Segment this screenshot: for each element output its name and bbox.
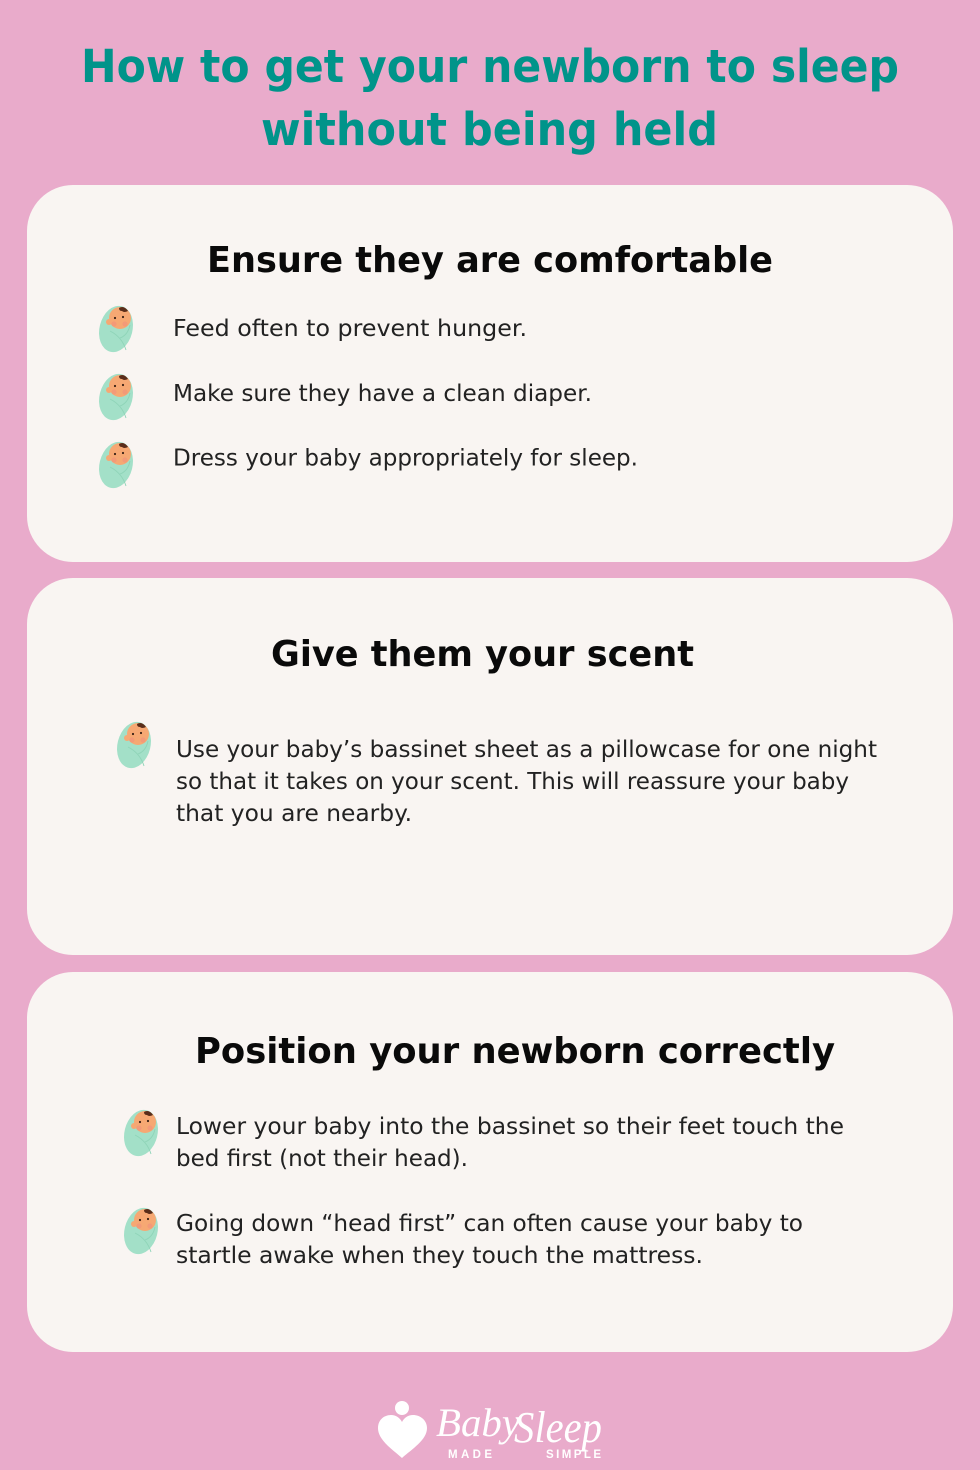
icon: swaddled baby 5 — [119, 1106, 163, 1160]
icon: swaddled baby 1 — [94, 302, 138, 356]
wordmark: Baby — [436, 1400, 520, 1445]
text: dress baby: Dress your baby appropriately for sleep. — [173, 444, 638, 472]
wordmark: MADE — [448, 1449, 492, 1461]
panel: position your newborn correctly — [27, 972, 953, 1352]
text: head first: Going down “head first” can often cause your baby to — [176, 1209, 803, 1237]
heading: position your newborn correctly: Position your newborn correctly — [195, 1031, 835, 1072]
text: clean diaper: Make sure they have a clean diaper. — [173, 379, 592, 407]
wordmark — [436, 1400, 602, 1461]
text: lower baby: Lower your baby into the bassinet so their feet touch the — [176, 1112, 844, 1140]
text: bassinet sheet — [176, 735, 877, 827]
icon: heart with dot — [378, 1401, 427, 1458]
title — [81, 40, 899, 156]
logo: Baby Sleep Made Simple — [378, 1400, 602, 1461]
icon: swaddled baby 3 — [94, 438, 138, 492]
title: without being held — [261, 103, 718, 156]
icon: swaddled baby 6 — [119, 1204, 163, 1258]
text: lower baby — [176, 1112, 844, 1172]
text: bassinet sheet: Use your baby’s bassinet sheet as a pillowcase for one night — [176, 735, 877, 763]
text: feed often: Feed often to prevent hunger. — [173, 314, 527, 342]
heading: ensure they are comfortable: Ensure they are comfortable — [207, 240, 773, 281]
text: lower baby: bed first (not their head). — [176, 1144, 468, 1172]
wordmark: SIMPLE — [546, 1449, 601, 1461]
heading: give them your scent: Give them your scent — [271, 634, 694, 675]
text: head first — [176, 1209, 803, 1269]
icon: swaddled baby 2 — [94, 370, 138, 424]
title: How to get your newborn to sleep — [81, 40, 899, 93]
panel: give them your scent — [27, 578, 953, 955]
text: bassinet sheet: that you are nearby. — [176, 799, 412, 827]
icon: swaddled baby 4 — [112, 718, 156, 772]
panel: ensure they are comfortable — [27, 185, 953, 562]
text: bassinet sheet: so that it takes on your scent. This will reassure your baby — [176, 767, 849, 795]
text: head first: startle awake when they touch the mattress. — [176, 1241, 703, 1269]
wordmark: Sleep — [514, 1403, 602, 1452]
